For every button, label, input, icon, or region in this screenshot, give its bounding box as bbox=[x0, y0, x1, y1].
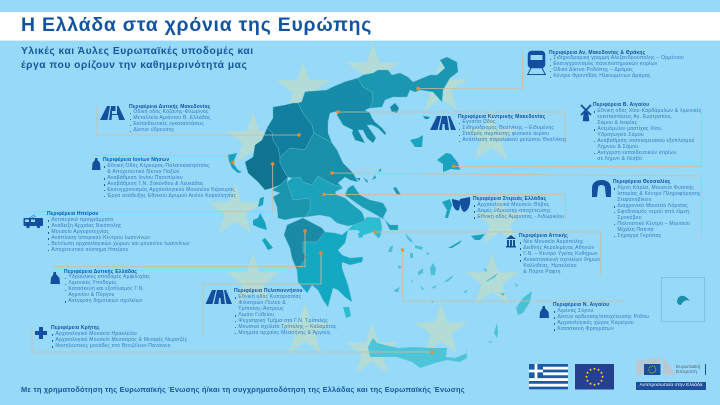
title band bbox=[0, 12, 720, 40]
text: Central Macedonia: Σιδηρόδρομος Θεσ/νίκης – Ειδομένης bbox=[462, 125, 554, 131]
region: Western Greece north bbox=[272, 177, 310, 220]
icon: ship west greece bbox=[50, 272, 60, 284]
text: Crete: Περιφέρεια Κρήτης bbox=[51, 325, 100, 331]
text: Thessaly bbox=[613, 179, 701, 239]
text: Peloponnese bbox=[234, 288, 337, 336]
subtitle: Υλικές και Άυλες Ευρωπαϊκές υποδομές και bbox=[21, 46, 254, 56]
location dots bbox=[231, 87, 455, 354]
text: Ionian Islands: Περιφέρεια Ιονίων Νήσων bbox=[103, 157, 169, 163]
text: Thessaly: Στεφανοβίκειο bbox=[617, 197, 652, 203]
text: Eastern Macedonia and Thrace: Οδικό Δίκτυο Ροδόπης – Δράμας bbox=[553, 67, 633, 73]
EU flag bbox=[575, 364, 614, 390]
text: Attica: & Πόρτο Ράφτη bbox=[523, 269, 561, 275]
icon: tunnel bbox=[592, 180, 611, 197]
region: Epirus bbox=[245, 128, 288, 190]
text: Peloponnese: Εθνική οδός Κυπαρισσίας bbox=[238, 294, 301, 300]
text: Peloponnese: Λιμάνι Γυθείου bbox=[238, 312, 274, 318]
text: Western Greece: Κατασκευή και εξοπλισμός Γ.Ν. bbox=[68, 286, 144, 292]
text: South Aegean: Κατασκευή Φραγμάτων bbox=[557, 326, 614, 332]
text: North Aegean: εγκαταστάσεις Αγ. Ευστρατίου, bbox=[597, 114, 672, 120]
region: Central Macedonia bbox=[298, 78, 386, 143]
islands: North Aegean bbox=[410, 135, 485, 248]
text: Thessaly: Πολιτιστικό Κέντρο – Μουσείο bbox=[617, 221, 690, 227]
text: Ionian Islands: & Αποχετευτικό δίκτυο Παξών bbox=[107, 169, 180, 175]
islands: Thasos and Samothrace bbox=[390, 103, 430, 119]
commission label: Επιτροπή bbox=[676, 370, 697, 375]
text: Central Macedonia: Εγνατία Οδός bbox=[462, 119, 496, 125]
text: Epirus: Ανάπλαση Ιστορικού Κέντρου Ιωαννίνων bbox=[51, 235, 150, 241]
text: Epirus: Ανάδειξη Αρχαίας Νικόπολης bbox=[51, 223, 122, 229]
text: Epirus: Αντιπυρικά προγράμματα bbox=[51, 217, 113, 223]
text: Thessaly: Σήραγγα Γκρόπας bbox=[617, 233, 661, 239]
text: North Aegean: Σάμου & Ικαρίας bbox=[597, 120, 637, 126]
text: Thessaly: Περιφέρεια Θεσσαλίας bbox=[613, 179, 671, 185]
region: Crete bbox=[368, 338, 467, 368]
icon: medical cross bbox=[35, 327, 47, 339]
text: Thessaly: Σμοκόβου bbox=[617, 215, 642, 221]
text: Western Greece: Ανέγερση δημοτικών σχολείων bbox=[68, 298, 143, 304]
icon: temple bbox=[506, 235, 516, 248]
region: Attica bbox=[348, 217, 382, 238]
text: Western Greece: Λιμενικές Υποδομές bbox=[68, 280, 117, 286]
text: North Aegean: Υδραγωγείο Σάμου bbox=[597, 132, 644, 138]
map regions bbox=[228, 57, 532, 368]
icon: train bbox=[527, 52, 546, 74]
text: South Aegean: Αρχαιολογικός χώρος Καμείρου bbox=[557, 320, 634, 326]
text: Thessaly: Ιστορίας & Κέντρο Πληροφόρησης bbox=[617, 191, 701, 197]
text: Crete bbox=[51, 325, 188, 349]
text: Thessaly: Διαχρονικό Μουσείο Λάρισας bbox=[617, 203, 688, 209]
text: Attica: Ανακατασκευή σχολείων δήμων bbox=[523, 257, 600, 263]
text: Western Greece: Αγρινίου & Πύργου bbox=[68, 292, 115, 298]
text: Central Greece: Περιφέρεια Στερεάς Ελλάδας bbox=[473, 196, 546, 202]
commission label bbox=[676, 364, 700, 375]
text: Epirus: Αποχετευτικό σύστημα Ηπείρου bbox=[51, 247, 129, 253]
text: Western Macedonia: Οδική οδός Κοζάνης-Φλώρινας bbox=[133, 109, 209, 115]
icon: road central macedonia bbox=[430, 116, 456, 130]
region: Central Greece bbox=[287, 176, 367, 226]
text: Western Greece bbox=[64, 268, 150, 304]
text: Central Greece: Εθνική οδός Άμφισσας - Λιδωρικίου bbox=[477, 214, 564, 220]
icon: road west macedonia bbox=[100, 106, 125, 120]
icon: ship south aegean bbox=[540, 306, 549, 318]
text: Peloponnese: Μουσικά σχολεία Τρίπολης – Καλαμάτας bbox=[238, 324, 337, 330]
subtitle: έργα που ορίζουν την καθημερινότητά μας bbox=[21, 60, 247, 71]
text: South Aegean bbox=[553, 302, 649, 332]
text: South Aegean: Περιφέρεια Ν. Αιγαίου bbox=[553, 302, 609, 308]
islands: Ionian bbox=[228, 153, 273, 250]
text: North Aegean bbox=[593, 102, 702, 162]
text: Ionian Islands: Εκσυγχρονισμός Αρχαιολογικού Μουσείου Κέρκυρας bbox=[107, 187, 235, 193]
text: Thessaly: Μιχάλη Παππά bbox=[617, 227, 654, 233]
text: Ionian Islands: Εθνική Οδός Κέρκυρας-Παλαιοκαστρίτσας bbox=[107, 163, 210, 169]
text: Peloponnese: Περιφέρεια Πελοποννήσου bbox=[234, 288, 303, 294]
text: North Aegean: Λήμνου & Σάμου bbox=[597, 144, 638, 150]
text: Central Macedonia: Ανάπλαση παραλιακού μετώπου Θεσ/νίκης bbox=[462, 137, 567, 143]
text: Central Greece: Δομές ύδρευσης-αποχέτευσης bbox=[477, 208, 551, 214]
text: North Aegean: Ανέγερση εκπαιδευτικών κτιρίων bbox=[597, 150, 677, 156]
islands: South Aegean bbox=[388, 233, 532, 343]
islands: Attica islands bbox=[343, 232, 363, 318]
icon: windmill bbox=[581, 105, 591, 121]
text: Western Macedonia: Εκπαιδευτικές εγκαταστάσεις bbox=[133, 121, 204, 127]
text: Thessaly: Λίμνη Κάρλα, Μουσείο Φυσικής bbox=[617, 185, 694, 191]
text: Crete: Αρχαιολογικό Μουσείο Μεσσαράς & Μιναρές Νερατζές bbox=[55, 337, 188, 343]
region: Peloponnese bbox=[297, 230, 363, 307]
text: North Aegean: σε Λήμνο & Λέσβο bbox=[597, 156, 642, 162]
text: Eastern Macedonia and Thrace bbox=[549, 50, 684, 79]
islands: Sporades bbox=[356, 168, 401, 195]
text: Central Greece bbox=[473, 196, 564, 220]
leader lines bbox=[23, 51, 702, 352]
text: Peloponnese: Μνημεία αρχαίας Μεσσήνης & Άργους bbox=[238, 330, 331, 336]
text: North Aegean: Ανεμόμυλοι μαστίχας Χίου, bbox=[597, 126, 663, 132]
icon: road peloponnese bbox=[206, 290, 232, 304]
text: Western Macedonia: Μεταλλεία Αμιάντου Β. Ελλάδας bbox=[133, 115, 211, 121]
Kastellorizo inset bbox=[662, 278, 704, 322]
text: Crete: Νοσηλευτικές μονάδες στο Βενιζέλειο-Πανάνειο bbox=[55, 343, 171, 349]
text: Ionian Islands bbox=[103, 157, 236, 199]
subtitle bbox=[21, 46, 254, 71]
text: Peloponnese: Φιλιατρών-Πύλου & bbox=[238, 300, 286, 306]
icon: ship ionian bbox=[92, 158, 100, 170]
text: Attica: Καλλιθέας, Ηρακλείου bbox=[523, 263, 577, 269]
text: Ionian Islands: Αναβάθμιση Γ.Ν. Ζακύνθου & Λευκάδας bbox=[107, 181, 204, 187]
representation banner bbox=[636, 382, 706, 390]
text: South Aegean: Δίκτυα αρδευσης/αποχέτευσης Ρόδου bbox=[557, 314, 649, 320]
icon: trolley bus bbox=[24, 214, 43, 228]
text: Eastern Macedonia and Thrace: Σιδηροδρομική γραμμή Αλεξανδρούπολης – Ορμένιου bbox=[553, 55, 684, 61]
text: Western Macedonia: Δίκτυο ύδρευσης bbox=[133, 127, 174, 133]
text: South Aegean: Λιμένας Σύρου bbox=[557, 308, 593, 314]
text: Central Greece: Αρχαιολογικό Μουσείο Θήβας bbox=[477, 202, 550, 208]
text: Central Macedonia bbox=[458, 114, 567, 143]
text: North Aegean: Αναβάθμιση νοσοκομειακού εξοπλισμού bbox=[597, 138, 695, 144]
EU stars ring bbox=[208, 43, 527, 374]
text: Western Macedonia bbox=[129, 104, 211, 133]
text: North Aegean: Εθνική οδός Χίου-Καρδάμυλων & λιμενικές bbox=[597, 108, 702, 114]
text: Eastern Macedonia and Thrace: Εκσυγχρονισμός πανεπιστημιακών κτιρίων bbox=[553, 61, 657, 67]
text: Attica: Νέο Μουσείο Ακρόπολης bbox=[523, 239, 584, 245]
text: Peloponnese: Ψυχιατρική Τμήμα στο Γ.Ν. Τρίπολης bbox=[238, 318, 328, 324]
text: Thessaly: Εφοδιασμός νερού από λίμνη bbox=[617, 209, 689, 215]
text: Ionian Islands: Έργα ανάδειξης Εθνικού Δρυμού Αινίου Κεφαλληνίας bbox=[107, 193, 236, 199]
European Commission logo bbox=[636, 356, 706, 375]
region: Thessaly bbox=[280, 133, 358, 188]
text: Eastern Macedonia and Thrace: Κέντρο Φροντίδας Ηλικιωμένων Δράμας bbox=[553, 73, 651, 79]
text: Epirus bbox=[47, 211, 190, 253]
text: Ionian Islands: Αναβάθμιση Ιονίου Πανεπ/μίου bbox=[107, 175, 183, 181]
region: Western Greece south bbox=[284, 218, 325, 270]
region: Eastern Macedonia and Thrace bbox=[358, 57, 458, 108]
region: Evia bbox=[345, 185, 398, 230]
region: Western Macedonia bbox=[267, 103, 314, 157]
footer funding statement: Με τη χρηματοδότηση της Ευρωπαϊκής Ένωσης ή/και τη συγχρηματοδότηση της Ελλάδας και της Ευρωπαϊκής Ένωσης bbox=[21, 384, 465, 394]
text: North Aegean: Περιφέρεια Β. Αιγαίου bbox=[593, 102, 649, 108]
commission label: Ευρωπαϊκή bbox=[676, 364, 700, 370]
text: Western Macedonia: Περιφέρεια Δυτικής Μακεδονίας bbox=[129, 104, 211, 110]
text: Attica: Γ.Ν. – Κέντρο Υγείας Κυθήρων bbox=[523, 251, 598, 257]
text: Western Greece: Περιφέρεια Δυτικής Ελλάδας bbox=[64, 268, 137, 274]
text: Attica bbox=[519, 233, 600, 275]
text: Attica: Διεθνής Αερολιμένας Αθηνών bbox=[523, 245, 594, 251]
text: Crete: Αρχαιολογικό Μουσείο Ηρακλείου bbox=[55, 331, 137, 337]
text: Peloponnese: Τρίπολης-Άστρους bbox=[238, 306, 284, 312]
representation banner: Αντιπροσωπεία στην Ελλάδα bbox=[639, 383, 703, 388]
text: Epirus: Μουσείο Αργυροτεχνίας bbox=[51, 229, 109, 235]
Greek flag bbox=[529, 364, 568, 390]
text: Eastern Macedonia and Thrace: Περιφέρεια Αν. Μακεδονίας & Θράκης bbox=[549, 50, 645, 56]
text: Epirus: Βελτίωση αρχαιολογικών χώρων και μουσείου Ιωαννίνων bbox=[51, 241, 190, 247]
text: Central Macedonia: Σταθμός συμπίεσης φυσικού αερίου bbox=[462, 131, 549, 137]
text: Western Greece: Υδραυλικές υποδομές Αμφιλοχίας bbox=[68, 274, 150, 280]
title: Η Ελλάδα στα χρόνια της Ευρώπης bbox=[21, 14, 372, 36]
text: Epirus: Περιφέρεια Ηπείρου bbox=[47, 211, 98, 217]
icon: theatre masks bbox=[452, 197, 470, 212]
text: Central Macedonia: Περιφέρεια Κεντρικής Μακεδονίας bbox=[458, 114, 545, 120]
text: Attica: Περιφέρεια Αττικής bbox=[519, 233, 568, 239]
